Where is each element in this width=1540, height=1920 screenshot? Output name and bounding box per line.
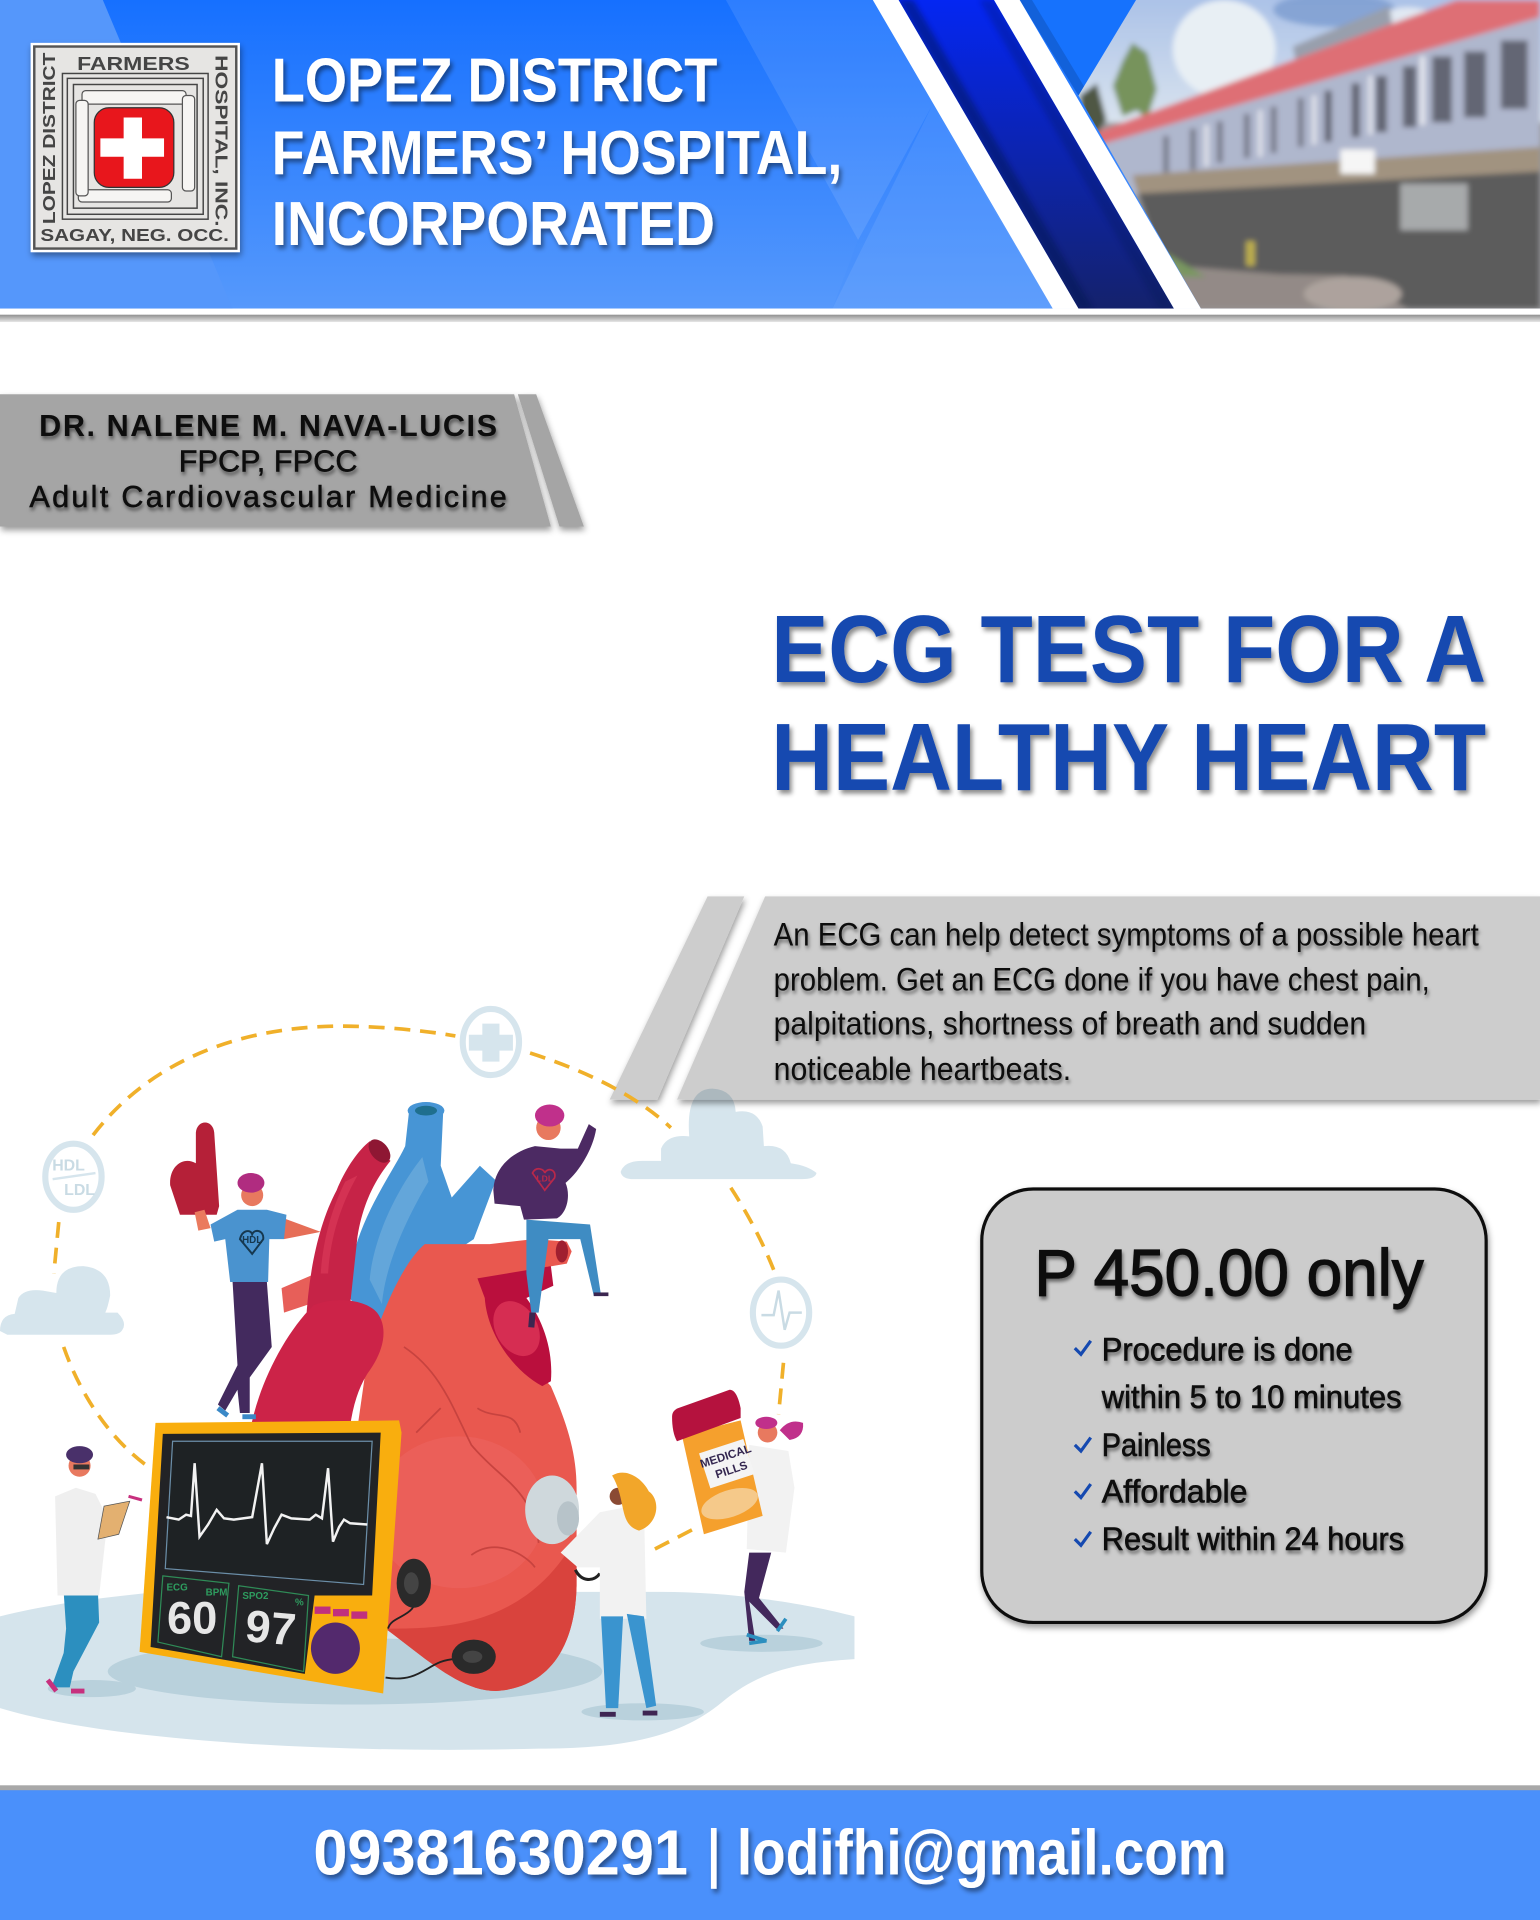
logo lettering: SAGAY, NEG. OCC. [40, 225, 229, 245]
check marks [1075, 1341, 1091, 1545]
icon: HDL LDL [45, 1144, 102, 1210]
ECG trace [166, 1463, 367, 1544]
monitor buttons [315, 1607, 367, 1619]
coral side vessel [282, 1273, 321, 1313]
header rule [0, 315, 1540, 322]
panel: doctor name [0, 394, 584, 527]
doctor credentials text: DR. NALENE M. NAVA-LUCIS [39, 409, 497, 443]
ECG readout: 60 [167, 1592, 217, 1643]
doctor credentials text: Adult Cardiovascular Medicine [29, 480, 507, 514]
logo lettering: HOSPITAL, INC. [211, 55, 231, 227]
heart body [343, 1239, 577, 1691]
character: LDL man sitting: LDL [536, 1174, 553, 1184]
benefit list: Procedure is done [1102, 1331, 1353, 1367]
price: P 450.00 only [1034, 1237, 1424, 1311]
ground shadows [48, 1635, 823, 1720]
benefit list [1101, 1331, 1404, 1557]
panel: price box [982, 1189, 1486, 1622]
hospital name heading [272, 46, 842, 259]
SpO2 readout [233, 1586, 308, 1671]
description text: palpitations, shortness of breath and sudden [774, 1006, 1366, 1042]
logo lettering: LOPEZ DISTRICT [39, 52, 59, 224]
icon: HDL LDL: LDL [64, 1182, 95, 1199]
hospital name heading: FARMERS’ HOSPITAL, [272, 118, 842, 188]
ECG readout [158, 1576, 229, 1657]
doctor credentials text: FPCP, FPCC [179, 444, 357, 478]
description text: problem. Get an ECG done if you have chest pain, [774, 962, 1430, 998]
ground [0, 1592, 854, 1750]
icon: medical plus [463, 1009, 519, 1075]
white diagonal stripes [873, 0, 1201, 309]
benefit list: Affordable [1102, 1473, 1247, 1509]
pill bottle: PILLS [714, 1459, 749, 1481]
benefit list: Painless [1102, 1427, 1211, 1463]
benefit list: Result within 24 hours [1102, 1521, 1404, 1557]
monitor screen [151, 1433, 381, 1674]
logo lettering: FARMERS [77, 53, 190, 74]
main title [771, 597, 1486, 811]
right atrium flap [477, 1266, 553, 1386]
heart [251, 1102, 577, 1691]
SpO2 readout: SPO2 [242, 1591, 269, 1602]
illustration: heart and characters [0, 1009, 854, 1750]
pill bottle [672, 1390, 763, 1534]
contact details: lodifhi@gmail.com [737, 1818, 1227, 1889]
contact details: 09381630291 [313, 1818, 688, 1889]
hospital logo [31, 43, 240, 252]
character: doctor with pill bottle [672, 1390, 803, 1643]
SpO2 readout: 97 [243, 1600, 298, 1655]
blue vena cava [346, 1102, 496, 1347]
blue diagonal band [899, 0, 1174, 309]
description text [774, 916, 1479, 1087]
monitor knob [311, 1622, 360, 1674]
doctor credentials text [29, 409, 507, 514]
icon: heartbeat [753, 1280, 809, 1346]
logo red cross [94, 108, 174, 187]
ECG readout: ECG [166, 1583, 188, 1594]
logo lettering [39, 52, 231, 245]
SpO2 readout: % [295, 1597, 304, 1608]
red aorta [306, 1135, 395, 1322]
character: HDL man with foam finger [170, 1123, 321, 1417]
contact details [313, 1818, 1227, 1889]
character: doctor with clipboard [48, 1446, 142, 1691]
description text: An ECG can help detect symptoms of a possible heart [774, 916, 1479, 952]
panel: ECG description [610, 896, 1540, 1100]
character: HDL man with foam finger: HDL [242, 1235, 262, 1246]
blue corner wedge [1056, 39, 1111, 95]
ECG readout: BPM [206, 1588, 227, 1599]
hospital name heading: INCORPORATED [272, 189, 715, 259]
header banner [0, 0, 1540, 318]
dashed orbit [54, 1026, 783, 1549]
description text: noticeable heartbeats. [774, 1051, 1071, 1087]
foam finger [170, 1123, 219, 1215]
hospital name heading: LOPEZ DISTRICT [272, 46, 717, 116]
pill bottle: MEDICAL [699, 1442, 753, 1471]
clouds [0, 1089, 817, 1335]
benefit list: within 5 to 10 minutes [1101, 1379, 1402, 1415]
character: doctor with stethoscope [525, 1473, 657, 1714]
icon: HDL LDL: HDL [52, 1158, 85, 1175]
aorta opening [556, 1240, 568, 1262]
left atrium [251, 1300, 384, 1427]
ECG monitor [140, 1420, 402, 1693]
electrodes and wires [386, 1559, 496, 1679]
character: LDL man sitting [493, 1104, 608, 1327]
footer bar [0, 1785, 1540, 1920]
contact details: | [708, 1818, 720, 1889]
hospital building photo [1053, 0, 1540, 318]
